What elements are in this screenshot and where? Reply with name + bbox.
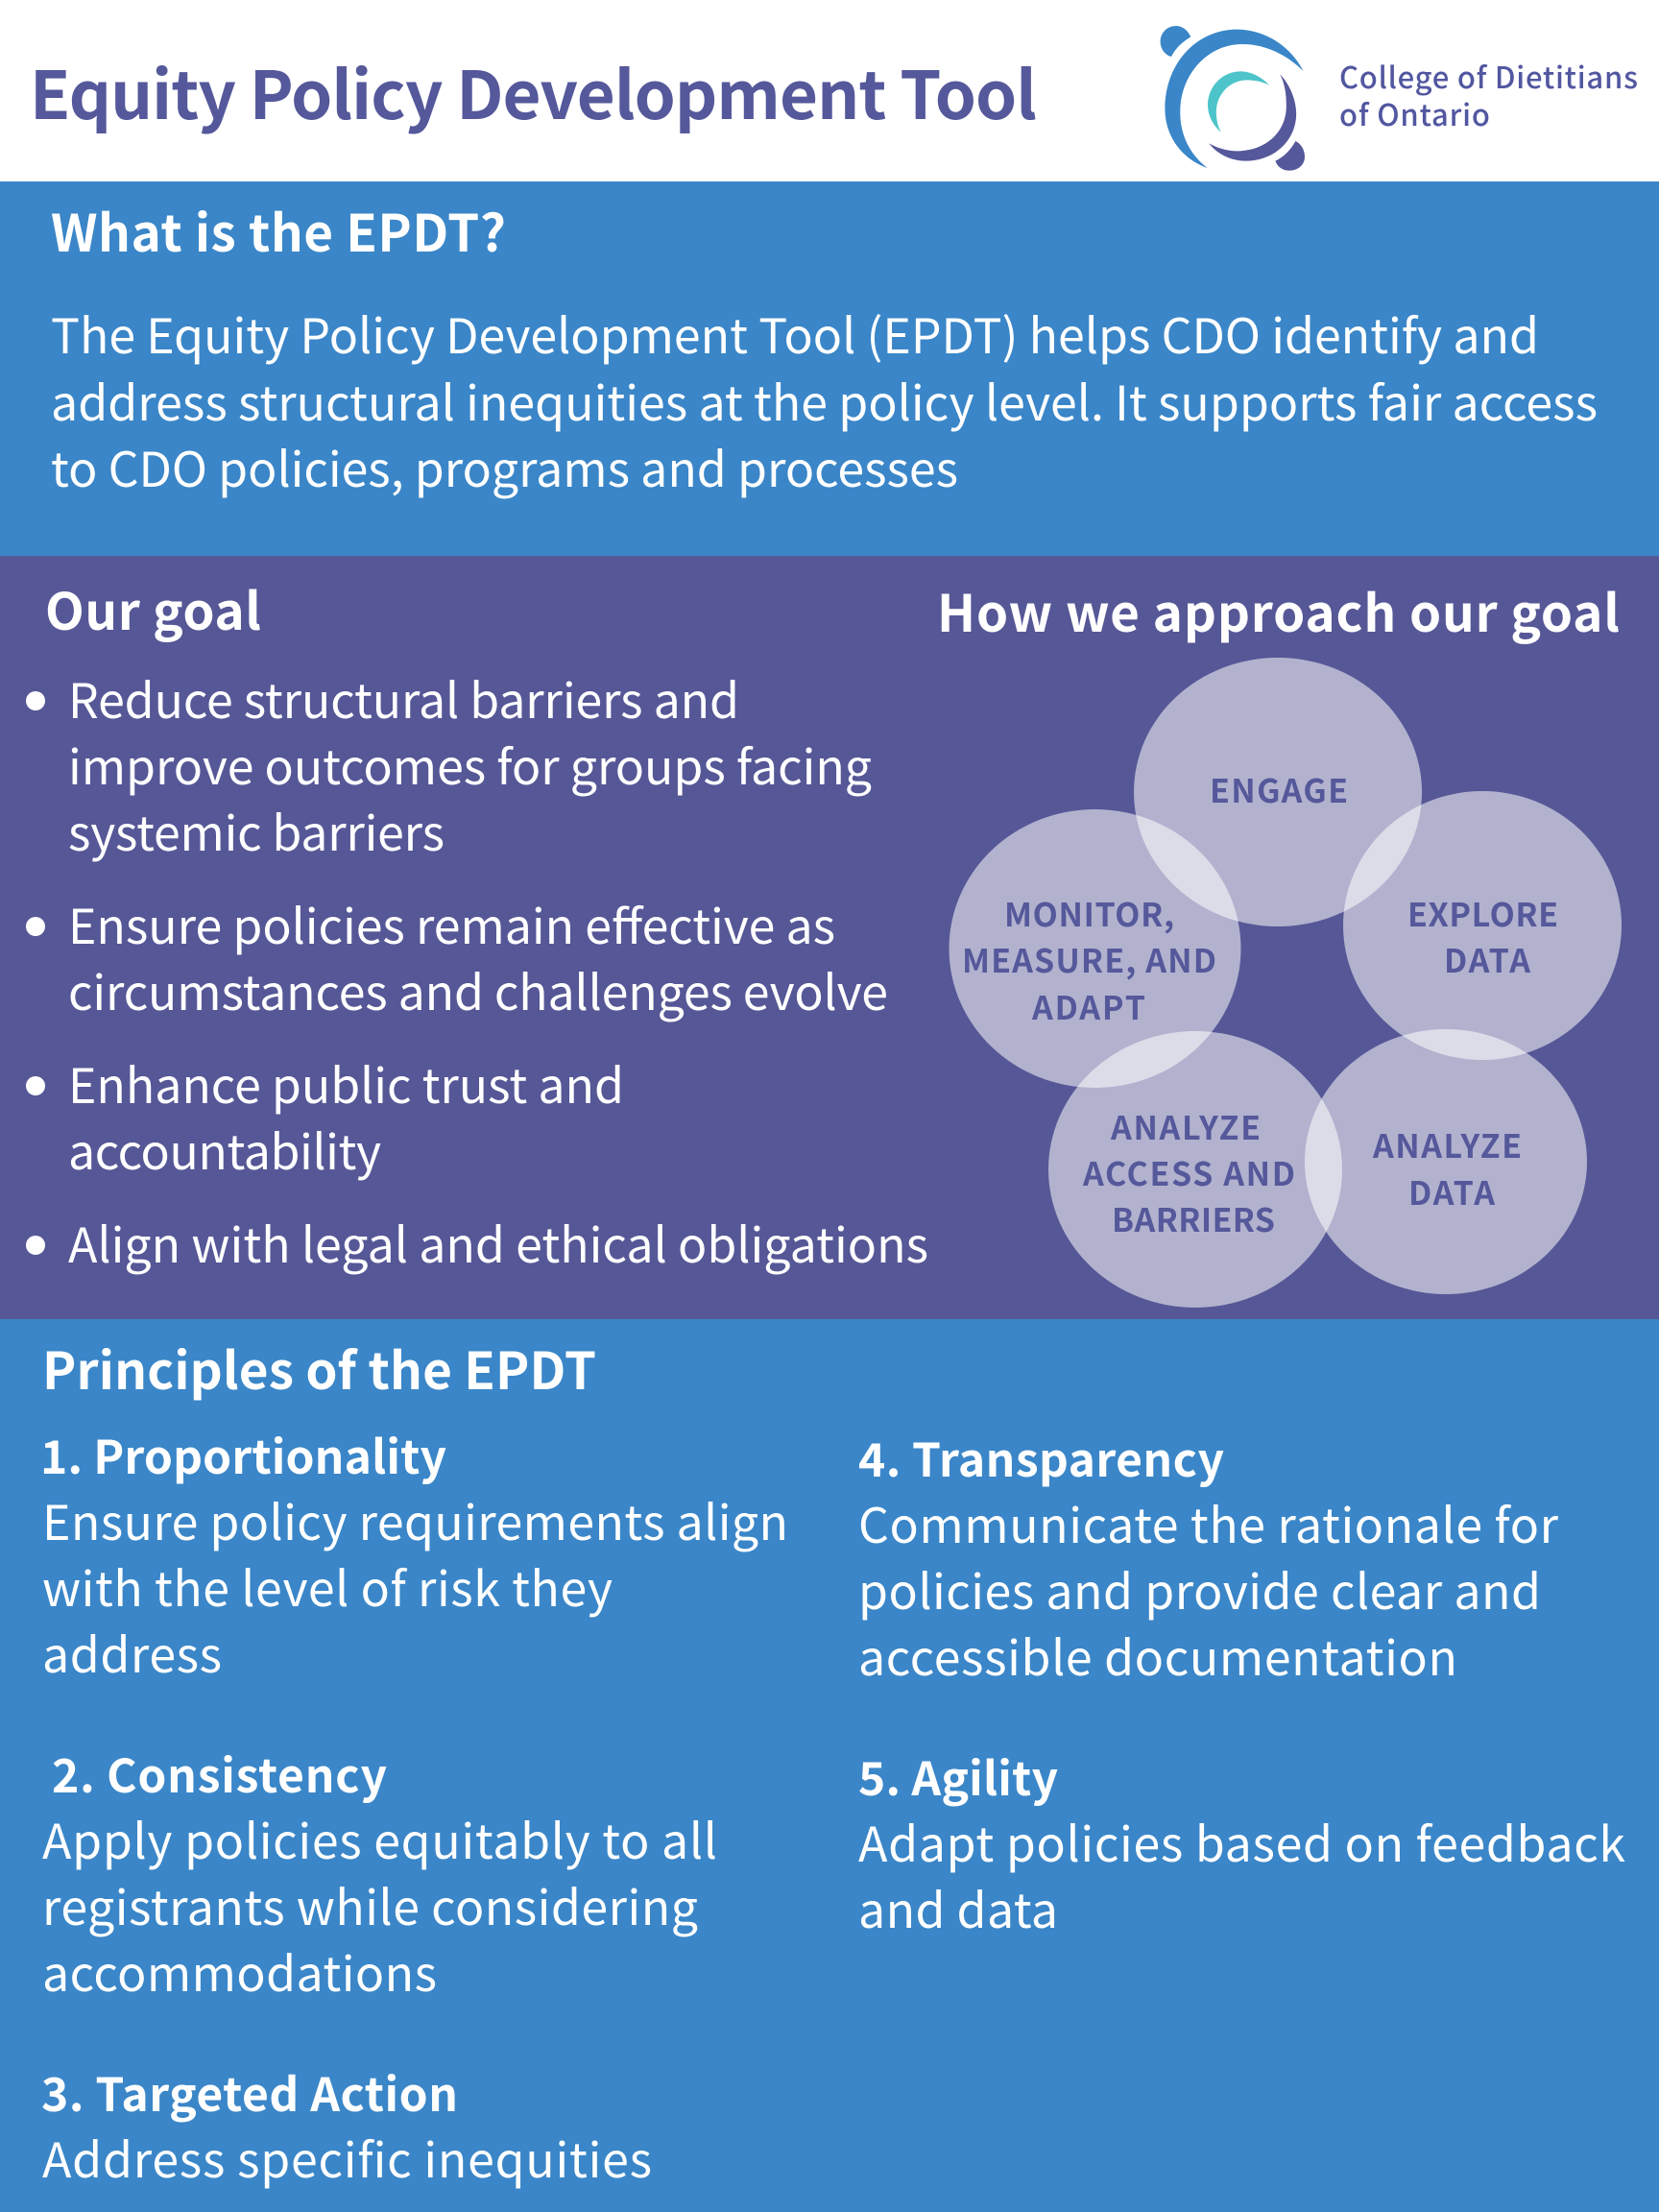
label: analyze data <box>1372 1120 1522 1214</box>
principle 5: agility: 5. Agility <box>858 1742 1058 1809</box>
bullet list: goals: circumstances and challenges evolve <box>68 955 888 1024</box>
text block: EPDT description: to CDO policies, programs and processes <box>51 432 958 501</box>
label: monitor, measure, and adapt: MEASURE, AND <box>962 935 1216 982</box>
principle 3: targeted action: Address specific inequities <box>42 2123 652 2192</box>
principle 1: proportionality: with the level of risk they <box>42 1551 613 1621</box>
logo wordmark: College of Dietitians <box>1339 54 1638 97</box>
label: monitor, measure, and adapt <box>962 889 1216 1029</box>
principle 5: agility: Adapt policies based on feedback <box>858 1807 1625 1876</box>
principle 4: transparency <box>858 1423 1559 1690</box>
panel: header <box>0 0 1659 181</box>
label: monitor, measure, and adapt: MONITOR, <box>1004 889 1174 936</box>
principle 5: agility <box>858 1742 1625 1942</box>
principle 3: targeted action: 3. Targeted Action <box>41 2057 458 2125</box>
logo wordmark <box>1339 54 1638 134</box>
bullet list: goals: Enhance public trust and <box>68 1048 624 1118</box>
principle 4: transparency: policies and provide clear and <box>858 1554 1541 1623</box>
label: monitor, measure, and adapt: ADAPT <box>1031 982 1145 1029</box>
principle 2: consistency: 2. Consistency <box>52 1739 387 1806</box>
bullet list: goals: Align with legal and ethical obligations <box>68 1208 928 1277</box>
bullet list: goals: Reduce structural barriers and <box>68 663 739 733</box>
text block: EPDT description: address structural inequities at the policy level. It supports fair access <box>51 366 1598 435</box>
principle 2: consistency: accommodations <box>42 1936 437 2006</box>
principle 2: consistency: Apply policies equitably to all <box>42 1804 717 1873</box>
label: analyze data: ANALYZE <box>1372 1120 1522 1167</box>
principle 1: proportionality: 1. Proportionality <box>40 1420 446 1487</box>
label: engage: ENGAGE <box>1210 765 1348 812</box>
principle 4: transparency: 4. Transparency <box>858 1423 1224 1490</box>
heading: what is the EPDT: What is the EPDT? <box>51 194 506 267</box>
heading: how we approach our goal: How we approach our goal <box>937 574 1620 647</box>
principle 1: proportionality: Ensure policy requirements align <box>42 1485 788 1554</box>
principle 1: proportionality <box>40 1420 788 1687</box>
principle 2: consistency <box>42 1739 717 2006</box>
title: Equity Policy Development Tool <box>30 42 1037 138</box>
bullet list: goals <box>26 663 928 1277</box>
label: analyze access and barriers: ACCESS AND <box>1082 1148 1295 1195</box>
logo wordmark: of Ontario <box>1339 91 1490 134</box>
text block: EPDT description <box>51 299 1598 501</box>
label: analyze access and barriers <box>1082 1102 1295 1241</box>
label: analyze data: DATA <box>1408 1167 1495 1214</box>
principle 2: consistency: registrants while considering <box>42 1870 698 1939</box>
label: analyze access and barriers: ANALYZE <box>1110 1102 1261 1149</box>
text block: EPDT description: The Equity Policy Development Tool (EPDT) helps CDO identify and <box>51 299 1539 368</box>
panel: principles <box>0 1319 1659 2212</box>
principle 5: agility: and data <box>858 1873 1058 1942</box>
icon: College of Dietitians logo <box>1161 26 1305 171</box>
label: explore data: EXPLORE <box>1407 889 1558 936</box>
heading: principles of the EPDT: Principles of the EPDT <box>42 1332 596 1405</box>
panel: goal and approach <box>0 556 1659 1319</box>
label: analyze access and barriers: BARRIERS <box>1112 1194 1275 1241</box>
bullet list: goals: improve outcomes for groups facing <box>68 730 872 799</box>
bullet list: goals: accountability <box>68 1115 381 1184</box>
bullet list: goals: systemic barriers <box>68 796 445 865</box>
principle 3: targeted action <box>41 2057 652 2192</box>
principle 4: transparency: Communicate the rationale for <box>858 1488 1559 1557</box>
bullet list: goals: Ensure policies remain effective as <box>68 889 835 958</box>
label: explore data: DATA <box>1444 935 1530 982</box>
panel: what is the EPDT <box>0 181 1659 556</box>
principle 4: transparency: accessible documentation <box>858 1621 1457 1690</box>
principle 1: proportionality: address <box>42 1618 222 1687</box>
label: explore data <box>1407 889 1558 982</box>
diagram: approach cycle circles <box>949 658 1622 1308</box>
heading: our goal: Our goal <box>45 572 261 645</box>
